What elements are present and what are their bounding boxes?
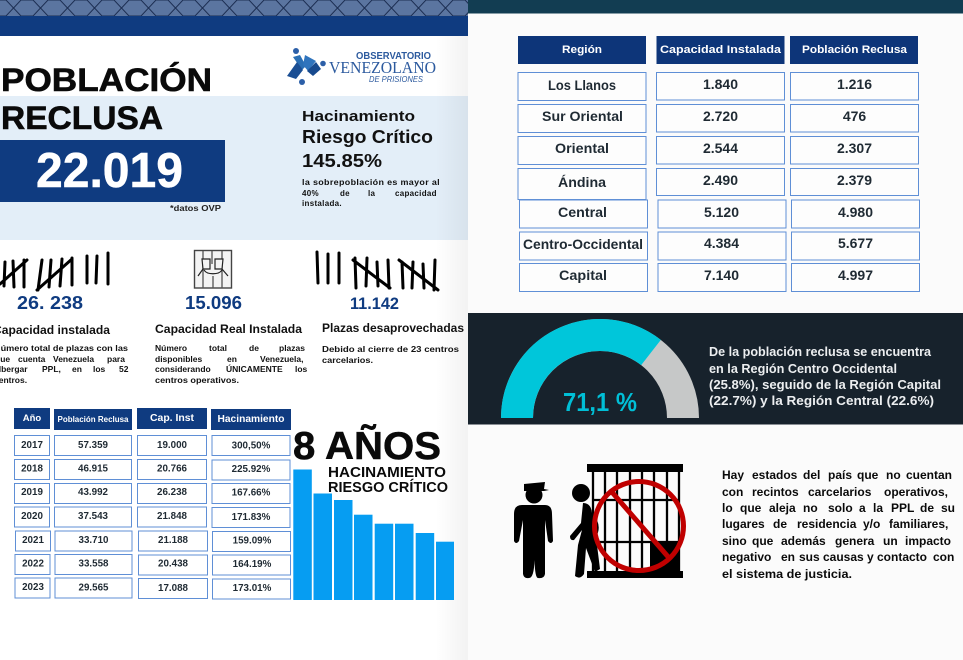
table rows: 2022 bbox=[22, 558, 44, 570]
stat: unused places bbox=[322, 295, 464, 365]
stat: real capacity: en bbox=[227, 354, 237, 364]
stat: real capacity: los bbox=[295, 364, 308, 374]
region table rows: 4.980 bbox=[838, 204, 873, 220]
title bbox=[1, 62, 212, 136]
overcrowding callout: capacidad bbox=[395, 189, 437, 198]
table rows: 20.438 bbox=[158, 558, 189, 570]
table rows: 19.000 bbox=[157, 440, 188, 451]
text block: operational centres: impacto bbox=[905, 534, 951, 548]
logo: DE PRISIONES bbox=[369, 75, 424, 84]
text block: operational centres: con bbox=[933, 550, 954, 564]
text block: operational centres: causas bbox=[823, 550, 864, 564]
region table rows: 2.490 bbox=[703, 172, 738, 188]
text block: operational centres bbox=[722, 468, 955, 581]
logo bbox=[287, 48, 436, 85]
chart heading bbox=[293, 424, 448, 496]
text block: operational centres: sus bbox=[799, 550, 820, 564]
stat: installed capacity: 52 bbox=[119, 364, 129, 374]
left page background bbox=[0, 0, 468, 660]
text block: operational centres: lo bbox=[722, 501, 733, 515]
stat: real capacity: Capacidad Real Instalada bbox=[155, 324, 303, 336]
stat: unused places: carcelarios. bbox=[322, 355, 373, 365]
region table rows: Oriental bbox=[555, 140, 609, 156]
source note: *datos OVP bbox=[170, 204, 222, 213]
overcrowding callout: 145.85% bbox=[302, 151, 382, 171]
region table rows: Centro-Occidental bbox=[523, 236, 643, 252]
region table rows bbox=[518, 72, 920, 292]
stat: real capacity: total bbox=[209, 343, 227, 353]
text block: operational centres: lugares bbox=[722, 517, 765, 531]
icon: tally marks unused places bbox=[317, 252, 438, 290]
icon: tally marks installed capacity bbox=[0, 253, 108, 290]
text block: operational centres: y bbox=[867, 550, 874, 564]
icon: prisoner hands behind bars bbox=[194, 250, 232, 288]
region table header bbox=[518, 36, 918, 64]
table rows: 21.848 bbox=[157, 511, 188, 522]
table header bbox=[14, 408, 291, 430]
icon: prisoner walking bbox=[570, 484, 600, 578]
text block: operational centres: negativo bbox=[722, 550, 771, 564]
region table rows: Capital bbox=[559, 267, 607, 283]
text block: operational centres: la bbox=[873, 501, 883, 515]
gauge description: De la población reclusa se encuentra bbox=[709, 345, 932, 359]
region table rows: 2.307 bbox=[837, 140, 872, 156]
text block: operational centres: con bbox=[722, 485, 743, 499]
text block: operational centres: sino bbox=[722, 534, 747, 548]
overcrowding callout: de bbox=[340, 189, 350, 198]
text block: operational centres: y/o bbox=[863, 517, 880, 531]
table rows: 225.92% bbox=[232, 464, 271, 475]
table header: Año bbox=[23, 413, 41, 424]
table rows: 173.01% bbox=[233, 583, 272, 594]
table rows: 2017 bbox=[21, 440, 43, 451]
text block: operational centres: en bbox=[781, 550, 795, 564]
table rows: 33.558 bbox=[79, 558, 109, 570]
overcrowding callout: instalada. bbox=[302, 199, 342, 208]
table rows: 37.543 bbox=[78, 511, 109, 522]
text block: operational centres: su bbox=[941, 501, 955, 515]
table rows: 171.83% bbox=[232, 512, 271, 523]
overcrowding callout: la sobrepoblación es mayor al bbox=[302, 178, 440, 187]
region table rows: 1.840 bbox=[703, 76, 738, 92]
text block: operational centres: aleja bbox=[769, 501, 796, 515]
table header: Cap. Inst bbox=[150, 413, 195, 424]
icon: guard bbox=[514, 482, 553, 578]
table rows: 164.19% bbox=[233, 559, 272, 570]
text block: operational centres: solo bbox=[828, 501, 853, 515]
text block: operational centres: cuentan bbox=[906, 468, 952, 482]
stat: installed capacity: en bbox=[72, 364, 82, 374]
gauge description: (25.8%), seguido de la Región Capital bbox=[709, 378, 941, 392]
icon: observatory mark bbox=[287, 48, 326, 85]
overcrowding callout: Hacinamiento bbox=[302, 108, 415, 125]
region table rows: Central bbox=[558, 204, 607, 220]
text block: operational centres: recintos bbox=[752, 485, 799, 499]
stat: installed capacity: PPL, bbox=[42, 364, 61, 374]
gauge value: 71,1 % bbox=[563, 387, 637, 417]
logo: OBSERVATORIO bbox=[356, 51, 431, 62]
text block: operational centres: no bbox=[886, 468, 901, 482]
table rows: 167.66% bbox=[232, 488, 271, 498]
table rows: 2020 bbox=[21, 511, 43, 522]
stat: unused places: 11.142 bbox=[350, 295, 399, 313]
text block: operational centres: genera bbox=[835, 534, 875, 548]
table rows: 2021 bbox=[22, 535, 44, 546]
region table rows: 2.544 bbox=[703, 140, 738, 156]
stat: real capacity: ÚNICAMENTE bbox=[226, 363, 283, 374]
region table rows: 4.384 bbox=[704, 235, 739, 251]
chart heading: HACINAMIENTO bbox=[328, 465, 446, 481]
region table rows: Sur Oriental bbox=[542, 108, 623, 124]
stat: installed capacity: los bbox=[93, 364, 106, 374]
stat: installed capacity bbox=[0, 293, 129, 385]
text block: operational centres: carcelarios bbox=[808, 485, 872, 499]
region table rows: 5.120 bbox=[704, 204, 739, 220]
text block: operational centres: que bbox=[740, 501, 762, 515]
stat: real capacity: 15.096 bbox=[185, 293, 242, 313]
table rows: 2023 bbox=[22, 582, 44, 593]
gauge description: (22.7%) y la Región Central (22.6%) bbox=[709, 394, 934, 408]
stat: installed capacity: para bbox=[107, 354, 125, 364]
text block: operational centres: un bbox=[883, 534, 898, 548]
bar chart: overcrowding by year bbox=[293, 470, 454, 600]
overcrowding callout: Riesgo Crítico bbox=[302, 127, 433, 147]
table rows: 57.359 bbox=[78, 440, 109, 451]
stat: real capacity bbox=[155, 293, 308, 385]
text block: operational centres: Hay bbox=[722, 468, 744, 482]
stat: real capacity: de bbox=[249, 343, 259, 353]
text block: operational centres: el sistema de justicia. bbox=[722, 567, 852, 581]
text block: operational centres: de bbox=[920, 501, 934, 515]
region table rows: 5.677 bbox=[838, 235, 873, 251]
region table rows: 2.720 bbox=[703, 108, 738, 124]
stat: installed capacity: 26. 238 bbox=[17, 293, 83, 313]
text block: operational centres: no bbox=[803, 501, 818, 515]
table rows: 2019 bbox=[21, 487, 43, 498]
table: regions bbox=[518, 36, 920, 292]
table rows: 26.238 bbox=[157, 487, 188, 498]
stat: real capacity: plazas bbox=[279, 343, 305, 353]
chart heading: RIESGO CRÍTICO bbox=[328, 479, 448, 496]
region table rows: 2.379 bbox=[837, 172, 872, 188]
text block: operational centres: PPL bbox=[891, 501, 914, 515]
table rows: 2018 bbox=[21, 464, 43, 474]
table rows: 21.188 bbox=[158, 535, 189, 546]
stat: real capacity: Venezuela, bbox=[260, 354, 303, 364]
region table rows: 476 bbox=[843, 108, 866, 124]
title: RECLUSA bbox=[1, 100, 163, 136]
table: yearly overcrowding bbox=[14, 408, 291, 599]
region table rows: 7.140 bbox=[704, 267, 739, 283]
region table rows: Los Llanos bbox=[548, 77, 616, 93]
table rows: 46.915 bbox=[78, 464, 109, 474]
table rows: 43.992 bbox=[78, 487, 109, 498]
stat: real capacity: disponibles bbox=[155, 354, 202, 364]
table rows: 33.710 bbox=[79, 535, 109, 546]
table rows: 20.766 bbox=[157, 464, 188, 474]
region table rows: 1.216 bbox=[837, 76, 872, 92]
title: POBLACIÓN bbox=[1, 62, 212, 98]
table rows: 300,50% bbox=[232, 440, 271, 452]
table rows: 29.565 bbox=[79, 582, 109, 594]
table header: Población Reclusa bbox=[58, 415, 129, 424]
overcrowding callout bbox=[302, 108, 440, 208]
gauge description bbox=[709, 345, 941, 408]
text block: operational centres: que bbox=[752, 534, 774, 548]
text block: operational centres: de bbox=[773, 517, 787, 531]
gauge chart bbox=[517, 335, 683, 418]
right page background bbox=[468, 0, 963, 660]
stat: unused places: Plazas desaprovechadas bbox=[322, 323, 464, 335]
stat: real capacity: centros operativos. bbox=[155, 375, 239, 385]
text block: operational centres: además bbox=[781, 534, 826, 548]
text block: operational centres: que bbox=[857, 468, 879, 482]
text block: operational centres: estados bbox=[752, 468, 798, 482]
stat: real capacity: Número bbox=[155, 343, 187, 353]
region table rows: 4.997 bbox=[838, 267, 873, 283]
text block: operational centres: del bbox=[803, 468, 820, 482]
text block: operational centres: familiares, bbox=[889, 517, 948, 531]
chart heading: 8 AÑOS bbox=[293, 424, 441, 468]
icon: closed prison cage with prohibition sign bbox=[587, 464, 684, 578]
table header: Hacinamiento bbox=[218, 414, 284, 425]
logo: VENEZOLANO bbox=[329, 58, 436, 77]
overcrowding callout: 40% bbox=[302, 189, 319, 198]
stat: installed capacity: cuenta bbox=[18, 354, 46, 364]
text block: operational centres: contacto bbox=[877, 550, 927, 564]
text block: operational centres: operativos, bbox=[884, 485, 948, 499]
total figure box: 22.019 bbox=[36, 144, 183, 198]
gauge description: en la Región Centro Occidental bbox=[709, 362, 897, 376]
table rows: 159.09% bbox=[233, 536, 272, 546]
table rows bbox=[14, 436, 290, 599]
region table header: Capacidad Instalada bbox=[660, 44, 782, 56]
region table rows: Ándina bbox=[558, 174, 606, 190]
stat: installed capacity: Venezuela bbox=[53, 354, 94, 364]
overcrowding callout: la bbox=[368, 189, 376, 198]
panel: dark gauge band bbox=[468, 313, 963, 424]
text block: operational centres: a bbox=[859, 501, 866, 515]
stat: unused places: Debido al cierre de 23 centros bbox=[322, 344, 459, 354]
text block: operational centres: país bbox=[828, 468, 852, 482]
region table header: Población Reclusa bbox=[802, 44, 908, 56]
text block: operational centres: residencia bbox=[797, 517, 857, 531]
region table header: Región bbox=[562, 44, 602, 56]
total figure box bbox=[0, 140, 225, 202]
table rows: 17.088 bbox=[158, 583, 189, 594]
stat: real capacity: considerando bbox=[155, 364, 211, 374]
